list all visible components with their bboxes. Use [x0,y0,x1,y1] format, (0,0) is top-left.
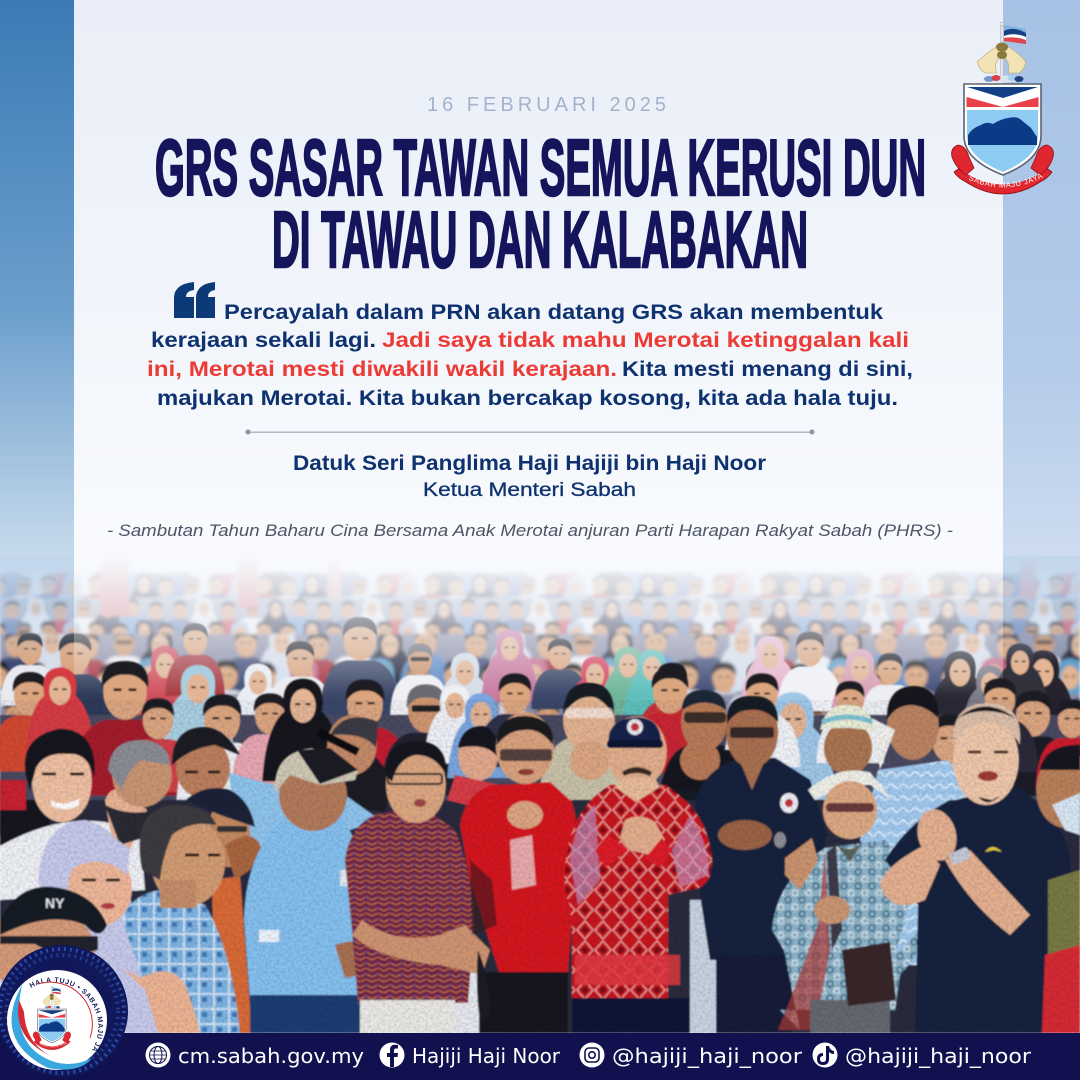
speaker name: Datuk Seri Panglima Haji Hajiji bin Haji Noor [293,452,766,475]
person: man with grey hair in blue batik shirt [122,805,240,1033]
photo grain [0,700,1080,1033]
icon: quotation mark [174,282,215,318]
quote text: majukan Merotai. Kita bukan bercakap kosong, kita ada hala tuju. [157,387,898,410]
person: man with glasses in black [660,690,745,790]
person: man in black shirt [880,703,1071,1033]
instagram handle: @hajiji_haji_noor [612,1044,803,1068]
person: man with NY cap: NY [45,895,65,911]
person: man in black shirt far left [0,780,50,845]
person: man in navy cap and orange shirt [186,788,262,1033]
quote text: Jadi saya tidak mahu Merotai ketinggalan kali [382,329,909,352]
badge logo [0,752,128,1077]
speaker role: Ketua Menteri Sabah [423,480,636,501]
icon: facebook [380,1042,404,1068]
person: man in light blue shirt behind [860,686,968,965]
event caption: - Sambutan Tahun Baharu Cina Bersama Anak Merotai anjuran Parti Harapan Rakyat Sabah (PHRS) - [107,521,953,540]
quote text [147,301,913,410]
person: man in purple batik [345,741,490,1033]
person: man in red batik chief minister [565,716,712,1033]
person: man in red batik [460,712,577,1033]
website: cm.sabah.gov.my [178,1044,364,1068]
person: man in black cap and light blue shirt [172,727,380,860]
person: old man with headdress in batik shirt [772,770,926,1033]
person: grey-haired man [105,740,172,845]
title [155,123,926,284]
icon: instagram [580,1042,604,1068]
date: 16 FEBRUARI 2025 [427,94,666,116]
person: man with face mask right [1036,745,1080,1033]
foreground people [0,683,1080,1033]
quote text: kerajaan sekali lagi. [151,329,376,352]
icon: globe [146,1042,170,1068]
shadow underlay [0,800,1080,1033]
person: dark-shirt man behind centre [548,683,615,800]
quote text: Percayalah dalam PRN akan datang GRS akan membentuk [224,301,883,324]
footer bar [0,1033,1080,1080]
divider [246,430,814,434]
facebook name: Hajiji Haji Noor [412,1044,561,1068]
person: woman in lavender hijab [38,820,160,1033]
footer links [146,1042,1032,1068]
tiktok handle: @hajiji_haji_noor [845,1044,1032,1068]
crowd fade overlay [0,556,1080,696]
person: man in blue polo and jeans [244,748,378,1033]
quote text: ini, Merotai mesti diwakili wakil kerajaan. [147,358,617,381]
icon: tiktok [812,1042,838,1068]
middle crowd rows [0,661,1080,835]
distant crowd [0,558,1080,744]
person: feather headdress man [820,705,895,775]
floor behind people [690,900,718,1033]
person: man with NY cap [0,887,110,1033]
quote text: Kita mesti menang di sini, [622,358,913,381]
hand pointing [122,968,200,1033]
person: sunglasses man behind [300,715,395,812]
person: man in navy shirt [695,696,827,1033]
logo: Sabah coat of arms [952,22,1053,194]
person: smiling man in white shirt [0,729,147,900]
far rows of heads [0,617,1077,743]
person: woman behind centre [447,726,500,812]
